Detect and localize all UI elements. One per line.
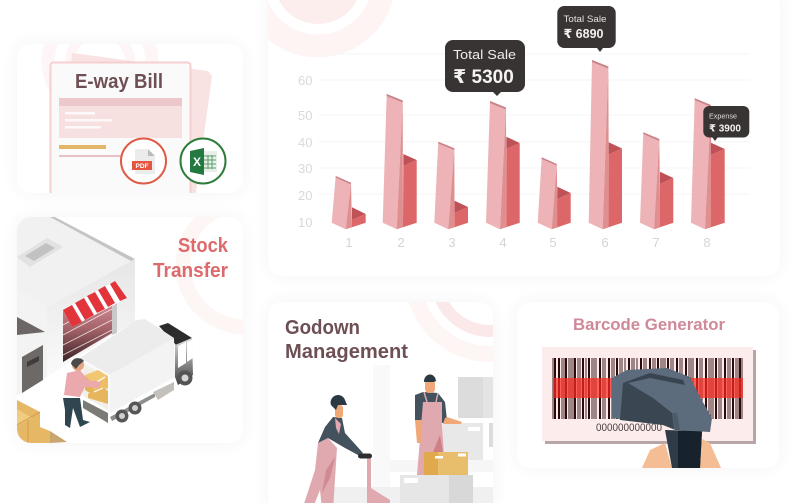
- heading: Godown Management: Godown: [285, 317, 360, 339]
- y axis labels: 60: [298, 73, 312, 88]
- icon: Excel: X: [193, 155, 201, 169]
- decorative rings: [413, 200, 567, 354]
- scanner: [612, 368, 712, 468]
- bar group 4: [486, 101, 520, 229]
- callout: Total Sale 5300: ₹ 5300: [453, 67, 514, 88]
- gold line: [59, 145, 106, 149]
- scan line: [553, 378, 743, 398]
- decorative ring: [183, 203, 307, 327]
- y axis labels: 10: [298, 215, 312, 230]
- y axis labels: [298, 73, 312, 230]
- bar group 3: [434, 142, 468, 229]
- awning: [63, 281, 127, 327]
- callout: Total Sale 6890: Total Sale: [564, 14, 606, 25]
- panel: E-way Bill: [17, 44, 243, 193]
- y axis labels: 30: [298, 161, 312, 176]
- barcode label: [542, 347, 756, 444]
- grid lines: [318, 54, 750, 194]
- heading: Godown Management: [285, 317, 408, 363]
- back boxes: [443, 377, 493, 460]
- x axis labels: 1: [345, 235, 353, 250]
- callout: Expense 3900: Expense: [709, 112, 737, 120]
- panel: sales chart: [268, 0, 780, 276]
- illustration: worker: [63, 358, 101, 428]
- callout: Total Sale 5300: [445, 40, 525, 96]
- callout: Total Sale 6890: [557, 6, 616, 52]
- bar group 1: [332, 176, 366, 229]
- heading: E-way Bill: E-way Bill: [75, 71, 163, 93]
- table block: [59, 98, 182, 138]
- decorative rings: [48, 10, 152, 114]
- front boxes: [400, 452, 473, 503]
- y axis labels: 20: [298, 188, 312, 203]
- heading: Stock Transfer: Stock: [178, 235, 229, 257]
- front sheet: [50, 62, 190, 202]
- y axis labels: 50: [298, 108, 312, 123]
- y axis labels: 40: [298, 135, 312, 150]
- barcode bars: [553, 358, 742, 419]
- icon: PDF: PDF: [136, 163, 149, 170]
- bar group 7: [640, 132, 673, 229]
- bar group 2: [383, 94, 417, 229]
- roller door: [63, 283, 117, 362]
- illustration: truck: [80, 319, 193, 423]
- x axis labels: 8: [703, 235, 711, 250]
- callout: Expense 3900: [703, 106, 749, 141]
- x axis labels: 2: [397, 235, 405, 250]
- bar group 8: [691, 98, 725, 229]
- callout: Expense 3900: ₹ 3900: [709, 124, 741, 134]
- decorative rings: [252, 0, 384, 46]
- panel: Godown Management: [268, 302, 493, 503]
- icon: PDF: [121, 138, 166, 184]
- illustration: stacked boxes: [17, 400, 67, 443]
- wheels: [116, 370, 192, 422]
- illustration: warehouse: [17, 216, 135, 395]
- back sheet: [60, 53, 212, 193]
- panel: Stock Transfer: [17, 217, 243, 443]
- heading: Godown Management: Management: [285, 341, 408, 363]
- heading: Barcode Generator: Barcode Generator: [573, 315, 725, 334]
- panel: Barcode Generator: [517, 302, 779, 468]
- barcode digits: 000000000000: [596, 422, 662, 434]
- heading: Stock Transfer: [153, 235, 229, 282]
- hand: [642, 438, 721, 468]
- warehouse background: [333, 365, 493, 503]
- pink line: [59, 155, 129, 157]
- x axis labels: 6: [601, 235, 609, 250]
- bar group 5: [538, 157, 571, 229]
- cargo boxes: [85, 370, 108, 404]
- x axis labels: 5: [549, 235, 557, 250]
- worker with trolley: [302, 395, 390, 503]
- icon: Excel: [180, 138, 226, 184]
- bar group 6: [589, 60, 622, 229]
- x axis labels: 7: [652, 235, 660, 250]
- callout: Total Sale 6890: ₹ 6890: [564, 27, 604, 41]
- x axis labels: [345, 235, 711, 250]
- worker with boxes: [415, 374, 462, 475]
- x axis labels: 4: [499, 235, 507, 250]
- heading: Stock Transfer: Transfer: [153, 260, 228, 282]
- callout: Total Sale 5300: Total Sale: [453, 47, 516, 62]
- x axis labels: 3: [448, 235, 456, 250]
